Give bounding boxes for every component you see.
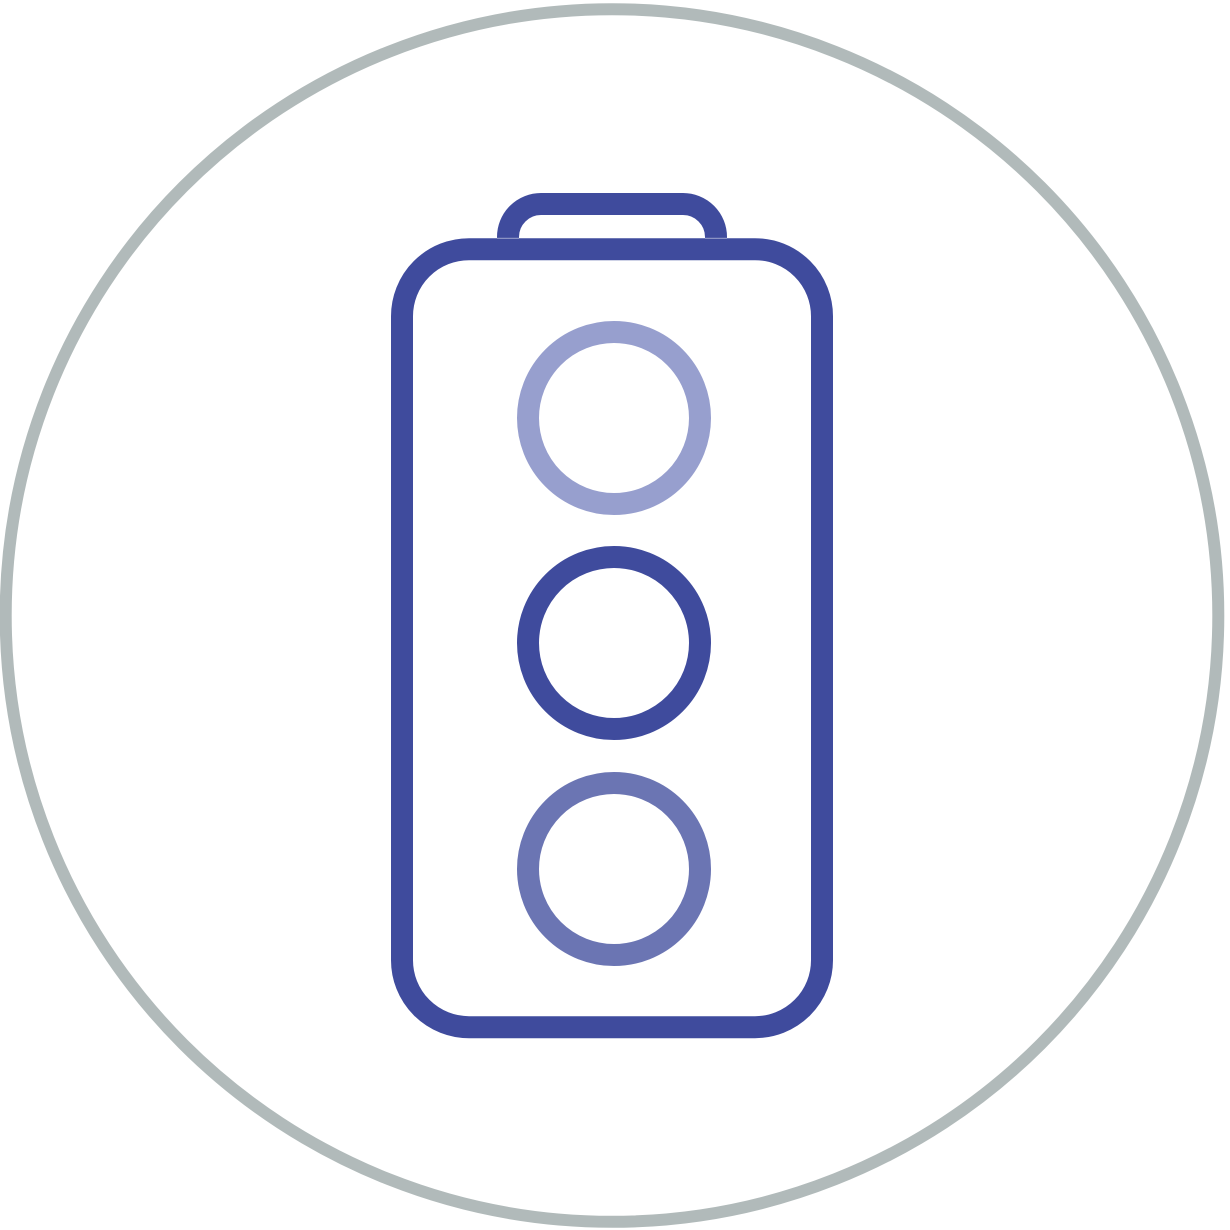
handle joint seam xyxy=(497,237,727,239)
top lamp xyxy=(528,332,700,504)
bottom lamp xyxy=(528,783,700,955)
traffic light top handle xyxy=(508,204,716,238)
middle lamp xyxy=(528,557,700,729)
traffic light housing xyxy=(402,249,822,1027)
icon: traffic light xyxy=(402,204,822,1027)
